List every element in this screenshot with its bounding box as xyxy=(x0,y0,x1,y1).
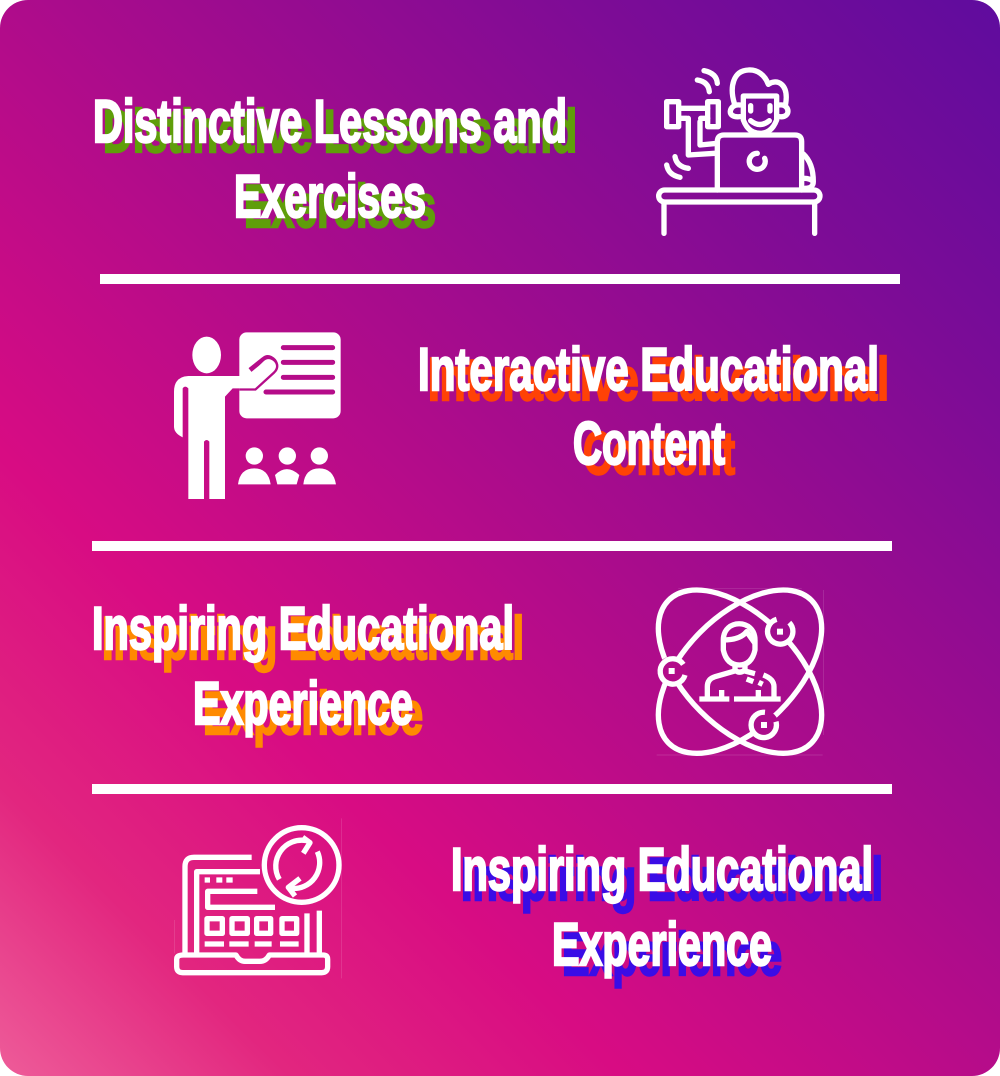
heading: Inspiring Educational Experience (orange): Inspiring Educational xyxy=(92,595,514,662)
icon: person inside atom orbits xyxy=(629,561,851,783)
heading: Inspiring Educational Experience (orange) xyxy=(92,595,524,747)
heading: Inspiring Educational Experience (blue) xyxy=(451,836,883,988)
divider xyxy=(100,274,900,284)
heading: Distinctive Lessons and Exercises: Distinctive Lessons and xyxy=(93,88,567,155)
icon: teacher presenting to audience xyxy=(174,332,341,499)
heading: Distinctive Lessons and Exercises xyxy=(93,88,577,240)
heading: Inspiring Educational Experience (orange): Experience xyxy=(203,680,423,747)
icon: student with dumbbell and laptop xyxy=(659,70,820,233)
heading: Interactive Educational Content: Content xyxy=(573,410,725,477)
heading: Inspiring Educational Experience (blue): Experience xyxy=(562,921,782,988)
heading: Interactive Educational Content: Content xyxy=(583,420,735,487)
heading: Interactive Educational Content xyxy=(418,336,889,487)
heading: Distinctive Lessons and Exercises: Exercises xyxy=(234,163,426,230)
divider xyxy=(92,784,892,794)
icon: laptop with sync symbol xyxy=(175,818,342,978)
heading: Inspiring Educational Experience (orange): Inspiring Educational xyxy=(102,605,524,672)
heading: Inspiring Educational Experience (blue): Experience xyxy=(552,911,772,978)
heading: Inspiring Educational Experience (orange): Experience xyxy=(193,670,413,737)
divider xyxy=(92,541,892,551)
heading: Distinctive Lessons and Exercises: Distinctive Lessons and xyxy=(103,98,577,165)
heading: Distinctive Lessons and Exercises: Exercises xyxy=(244,173,436,240)
